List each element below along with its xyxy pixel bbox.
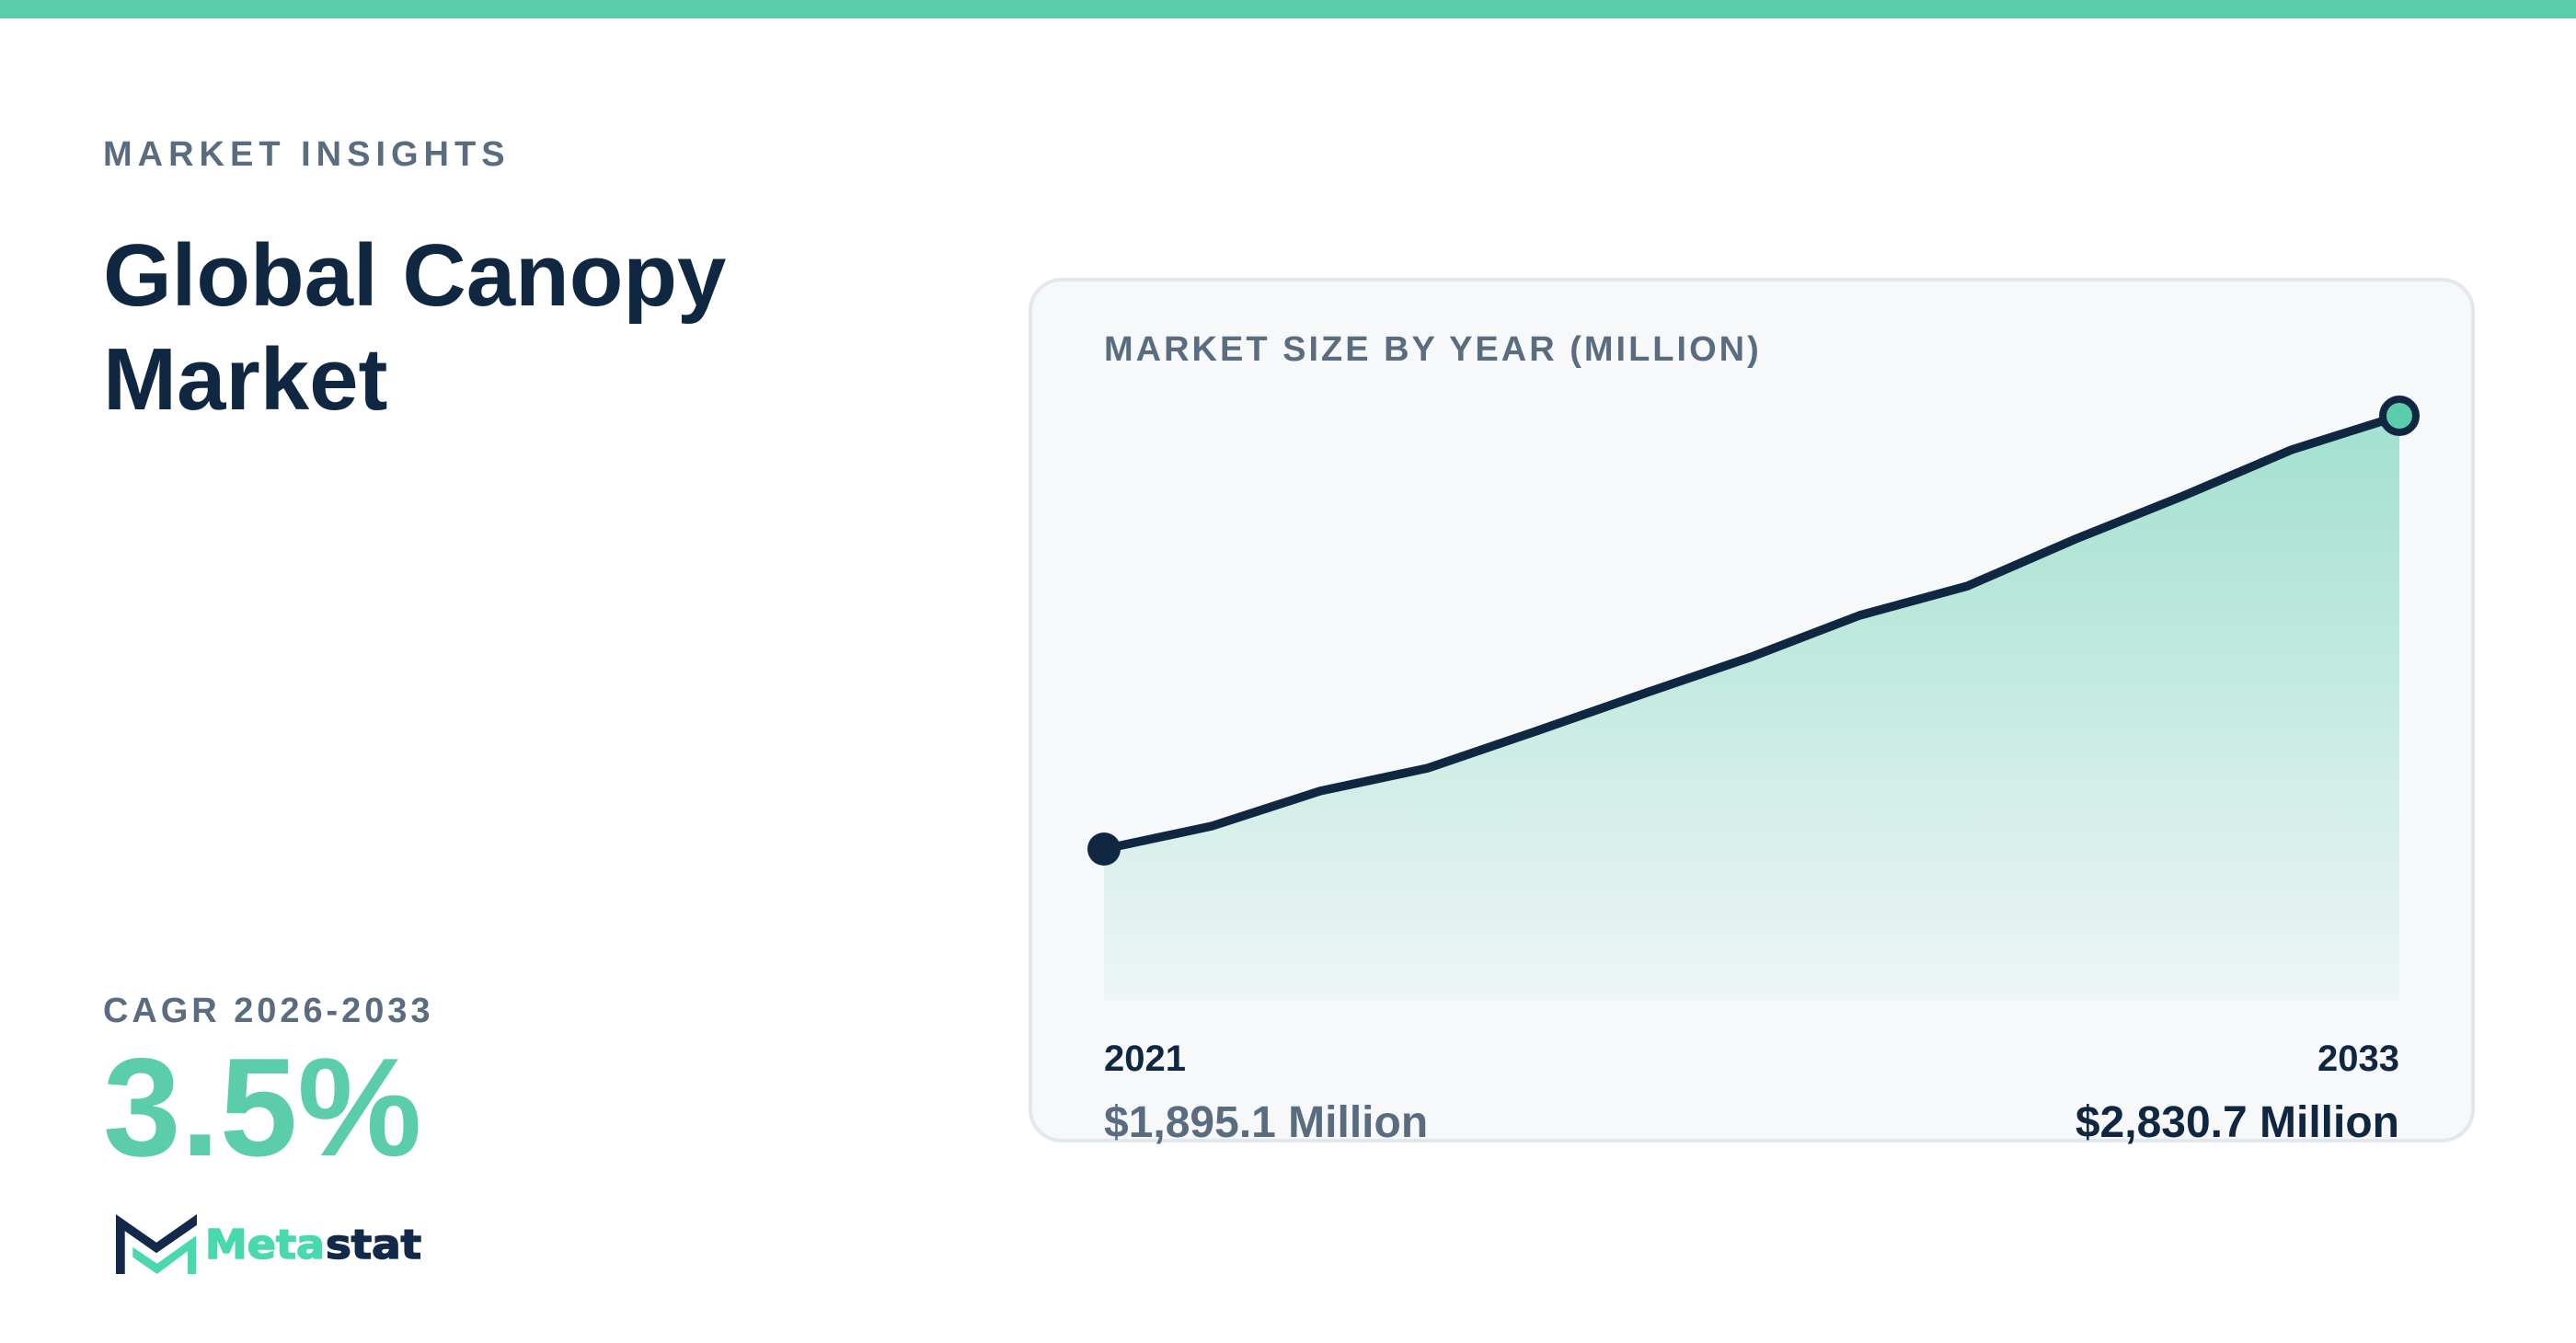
line chart	[1087, 396, 2420, 1001]
top accent bar	[0, 0, 2576, 18]
start value: $1,895.1 Million	[1104, 1098, 1428, 1147]
title: Market	[103, 330, 387, 429]
icon: logo green chevron	[132, 1235, 196, 1274]
trend line	[1104, 416, 2399, 849]
start point marker	[1087, 832, 1121, 866]
logo wordmark: stat: stat	[326, 1222, 421, 1268]
icon: logo navy chevron	[116, 1214, 197, 1274]
title	[103, 226, 726, 429]
CAGR value: 3.5%	[103, 1029, 421, 1186]
end year label: 2033	[2317, 1039, 2399, 1079]
area fill	[1104, 416, 2399, 1001]
logo: Metastat	[116, 1214, 421, 1274]
eyebrow: market insights: MARKET INSIGHTS	[103, 135, 511, 174]
title: Global Canopy	[103, 226, 726, 325]
logo wordmark: Meta: Meta	[205, 1222, 325, 1268]
start year label: 2021	[1104, 1039, 1186, 1079]
CAGR label: CAGR 2026-2033	[103, 992, 433, 1030]
panel: market size chart card	[1029, 278, 2475, 1142]
end value: $2,830.7 Million	[2076, 1098, 2399, 1147]
chart heading: MARKET SIZE BY YEAR (MILLION)	[1104, 330, 1762, 369]
end point marker	[2383, 399, 2416, 432]
